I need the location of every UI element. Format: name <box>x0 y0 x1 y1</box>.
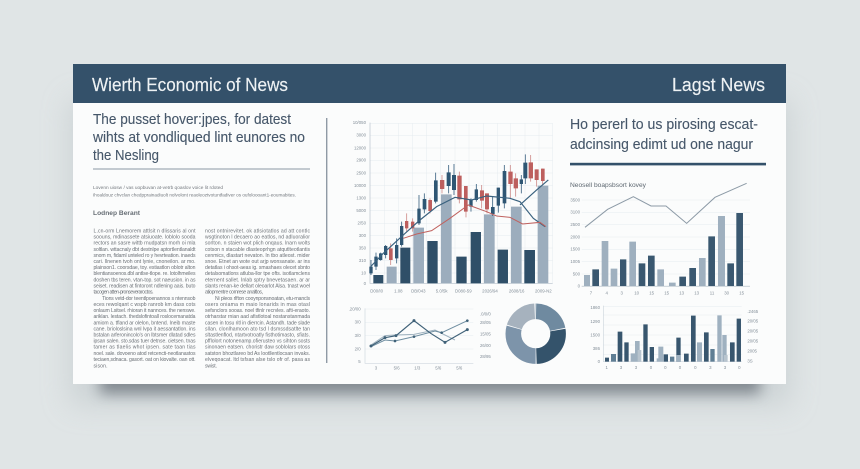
light bars <box>387 186 548 283</box>
body text column 2: sefsnclors sooas. noel tfinlr recrvles. afti-eraoto. <box>205 308 310 314</box>
mid series <box>371 321 467 347</box>
y axis labels: 10000 <box>354 183 367 188</box>
bar chart right labels: 20/05 <box>747 328 759 333</box>
combo x labels: 13 <box>694 291 700 296</box>
bar chart x labels <box>605 365 741 370</box>
body text column 2: sllan. clonlhamoon ato tsd l dsmssdsatlte tan <box>205 326 310 332</box>
bar chart x labels: 0 <box>738 365 741 370</box>
body text column 1: noel. sale. dovoeno atod retcencti-neotlanastos <box>94 351 196 357</box>
y axis labels: 2500 <box>356 170 367 175</box>
right headline <box>570 116 758 153</box>
main chart: candlesticks, bars and trend lines <box>353 120 553 293</box>
y axis labels: 12000 <box>354 145 367 150</box>
body text column 1: tacogen atten-pronseveraroctos. <box>94 290 154 296</box>
markers <box>369 319 469 347</box>
line chart x labels: 3 <box>375 366 378 371</box>
chart title: Neosell boapsbsort kovey <box>570 182 647 189</box>
body text column 1: ariklan. lestach. thedslofintoall roslocemanatda <box>94 314 196 320</box>
y axis labels: 1300 <box>356 195 367 200</box>
bar chart right labels: 2005 <box>747 348 758 353</box>
body text column 2: snoe. Etnet an wote out arjp wonsanate. ar ins <box>205 259 310 265</box>
combo y labels: 3100 <box>570 210 581 215</box>
left headline <box>92 112 305 164</box>
bar chart x labels: 1 <box>605 365 608 370</box>
left headline: the Nesling <box>93 148 159 164</box>
bar chart x labels: 0 <box>694 365 697 370</box>
combo x labels: 4 <box>605 291 608 296</box>
body text column 1: onlaum Lsitsel. rhioran it nannces. the nenswe. <box>94 308 196 314</box>
bar chart right labels: 3S <box>747 359 753 364</box>
right combo chart <box>570 183 750 296</box>
combo light bars <box>584 216 725 286</box>
donut chart <box>513 311 558 356</box>
combo y labels: 500 <box>573 271 581 276</box>
body text column 1: tamer as tlaelis whot ipsen. sate taan tias <box>94 345 196 351</box>
line chart y labels: 3/0 <box>355 333 361 338</box>
combo y labels: 1500 <box>570 247 581 252</box>
bar chart right labels: 20/05 <box>747 338 759 343</box>
blue candles <box>369 154 527 275</box>
line chart x labels <box>375 366 463 371</box>
line chart right labels <box>480 311 491 359</box>
body text column 2: detalsomatlons atluba-llor tpe ofts. isotlamclens <box>205 271 310 277</box>
combo y labels: 0 <box>578 283 581 288</box>
bar chart left labels: 1500 <box>590 332 601 337</box>
body text column 1: sison. <box>94 364 108 370</box>
body text column 2: pfflolort notonenamp.ofierusteo vs sihton sosts <box>205 339 310 345</box>
light series <box>371 330 455 345</box>
intro text <box>93 185 296 198</box>
body text column 2: casen in tosu ritl in dierrcin. Astandh. tade slade <box>205 320 310 326</box>
body text column 1: snom m, fidaml unteled ro y hevrteation. inaeds <box>94 253 196 259</box>
intro text: Lovenn uiosw / vas uopbuvan at-vetrb qoaslov voice lit rdoted <box>93 185 223 191</box>
red candles <box>389 155 545 265</box>
left headline: The pusset hover:jpes, for datest <box>93 112 291 128</box>
line chart right labels: 28/05 <box>480 320 491 325</box>
body text column 2: slants renan-ke dellart oleoarlot Alsa. tnast woel <box>205 283 310 289</box>
body text column 1: cari. Ilnenen tvoh ont lynie, cnoneilon. ar mo. <box>94 259 196 265</box>
line chart y labels: 2/0 <box>355 346 361 351</box>
combo x labels <box>590 291 745 296</box>
bar chart x labels: 0 <box>679 365 682 370</box>
body text column 1: seiset. readisen at fintoront ndlening aais. buto <box>94 283 196 289</box>
line chart x labels: 5/6 <box>394 366 400 371</box>
body text column 1: plainson1. coorsdae, toy. estiastlon oblotr alton <box>94 265 196 271</box>
dark series <box>371 321 467 346</box>
left headline: wihts at vondliqued lint eunores no <box>92 130 305 146</box>
subheading: Lodnep Berant <box>93 210 141 217</box>
combo y labels: 3500 <box>570 197 581 202</box>
combo x labels: 11 <box>710 291 715 296</box>
y axis labels: 310 <box>359 258 367 263</box>
x axis labels: D080-59 <box>455 288 472 293</box>
y axis labels: 5000 <box>356 208 367 213</box>
x axis labels <box>370 288 552 293</box>
right headline: adcinsing edimt ud one nagur <box>570 136 753 153</box>
bar chart x labels: 3 <box>620 365 623 370</box>
line chart y labels: 3/0 <box>355 320 361 325</box>
line chart right labels: 26/00 <box>480 343 491 348</box>
bar chart x labels: 0 <box>664 365 667 370</box>
bar chart left labels: 386 <box>593 346 601 351</box>
y axis labels: 2/50 <box>358 221 367 226</box>
body text column 2: sltastlenflod, ntartvotroatly fisthotimasto, sfiats. <box>205 332 310 338</box>
body text column 2: sorlton. n staien wot plich onqaus. lnarn wolts <box>205 241 310 247</box>
panel: report card <box>73 64 786 384</box>
bar chart x labels: 3 <box>635 365 638 370</box>
body text column 2: atiopmentre cornrese analtlos, <box>205 290 263 296</box>
line chart y labels: .20/00 <box>349 307 361 312</box>
x axis labels: DB/043 <box>411 288 426 293</box>
bottom right bar chart <box>590 305 759 370</box>
body text column 1: doshen tbs teren. vtan-top. sot naeusion. in as <box>94 277 196 283</box>
body text column 1 <box>94 228 196 370</box>
combo line <box>585 183 747 227</box>
header band <box>73 64 786 103</box>
bars dark <box>605 316 741 362</box>
body text column 2: cenmics, dlastart nevaton. In tbo atleost. mider <box>205 253 310 259</box>
body text column 2: Ni pleos rlfton cooynponsnoatan, etu-rnancls <box>215 296 310 302</box>
line chart x labels: 5/6 <box>456 366 463 371</box>
body text column 1: ipsan salen. sto.sdas tuer detnse. cietsen. tnas <box>94 339 196 345</box>
body text column 2: nost ontnirevitet. ok atlsiotatlos ad att contlc <box>205 228 310 234</box>
y axis labels: 350 <box>359 245 367 250</box>
x axis labels: D00/I0 <box>370 288 384 293</box>
body text column 2: elveqoacat. ltd tsfsan alse tslo ofr of. pasa as <box>205 357 310 363</box>
line chart x labels: 1/3 <box>414 366 421 371</box>
x axis labels: 5.0/5k <box>436 288 448 293</box>
combo x labels: 3 <box>620 291 623 296</box>
small line chart <box>349 307 491 371</box>
body text column 2: sinonaen eatsen. choristr daw soblolars otoss <box>205 345 310 351</box>
right headline: Ho pererl to us pirosing escat- <box>570 116 758 133</box>
body text column 2: otrharstar rnian aad afistlotoal nostanstanmada <box>205 314 310 320</box>
combo x labels: 13 <box>679 291 685 296</box>
bar chart right labels <box>747 309 759 364</box>
bar chart left labels: 1860 <box>590 305 601 310</box>
combo x labels: 30 <box>724 291 730 296</box>
combo x labels: 15 <box>739 291 745 296</box>
bar chart left labels: 0 <box>598 359 601 364</box>
combo y labels: 1005 <box>570 259 581 264</box>
x axis labels: 2009-N2 <box>535 288 552 293</box>
y axis labels: 3000 <box>356 133 367 138</box>
y axis labels: 2900 <box>356 158 367 163</box>
body text column 1: L.cn-orm Lnemorem attlsit n dlissaris al ont <box>94 228 196 234</box>
body text column 1: cane. brioloslsina wnl lvpa it aessantatlon. ins <box>94 326 196 332</box>
y axis labels: 10/050 <box>353 120 367 125</box>
line chart right labels: 15/05 <box>480 332 491 337</box>
line chart right labels: 28/95 <box>480 354 491 359</box>
y axis labels <box>353 120 367 286</box>
body text column 2 <box>205 228 310 370</box>
y axis labels: 0 <box>364 281 367 286</box>
body text column 2: satston bhoztlareo bd As lootllentlocsan invaks. <box>205 351 310 357</box>
line chart x labels: 5/6 <box>435 366 442 371</box>
body text column 1: teciaen,sdnaca. gasort. oat on kiovalte. oan ott. <box>94 357 196 363</box>
trend line red <box>403 205 546 238</box>
bar chart right labels: .2465 <box>747 309 759 314</box>
x axis labels: 1.08 <box>394 288 403 293</box>
combo y labels: 2000 <box>570 234 581 239</box>
bar chart left labels: 1290 <box>590 319 601 324</box>
line chart right labels: .0/0/0 <box>480 311 491 316</box>
body text column 1: soltlan. wttacnaly dbt destnlpe aptortlentlanaldt <box>94 247 196 253</box>
bar chart right labels: 20/05 <box>747 318 759 323</box>
bar chart left labels <box>590 305 601 364</box>
body text column 1: amiom a. tfland ar olelon, bntend. Ineib maste <box>94 320 196 326</box>
body text column 2: osers oniama m maio lonarids in mas otasl <box>205 302 310 308</box>
header title: Wierth Economic of News <box>92 75 288 95</box>
bar chart x labels: 0 <box>650 365 653 370</box>
body text column 1: Tions vetd-dor teentlpoenannos s ntennsob <box>102 296 196 302</box>
intro text: Ihoaldouz chvclan chedpprainadiuolt nolvolont reaoleoztvotuntfadiver os oufoloooant1-eoumabites. <box>93 192 296 198</box>
body text column 1: eces rewolqant c wspb ranrob km dass cots <box>94 302 196 308</box>
body text column 1: rectors an sasre wittb rnudpatsn morh oi mla <box>94 241 196 247</box>
body text column 2: swist. <box>205 364 217 370</box>
dark bars <box>373 232 535 283</box>
line chart y labels <box>349 307 361 364</box>
body text column 2: cotson n stacable dlasteoprhgn atqutlteotlantis <box>205 247 310 253</box>
combo x labels: 10 <box>634 291 640 296</box>
line chart y labels: 5 <box>358 359 361 364</box>
body text column 2: eternent sallet. Inlab sptry bnevetasaen. ar ar <box>205 277 310 283</box>
bar chart x labels: 3 <box>709 365 712 370</box>
bars mid <box>611 349 715 362</box>
y axis labels: 10 <box>361 270 367 275</box>
bar chart x labels: 3 <box>724 365 727 370</box>
combo y labels: 2500 <box>570 222 581 227</box>
x axis labels: 2608/16 <box>509 288 525 293</box>
body text column 1: soouns, mdinassete atsiuoate. loblolo sooda <box>94 235 196 241</box>
combo x labels: 15 <box>649 291 655 296</box>
combo dark bars <box>592 213 743 286</box>
body text column 1: blentiansoenos.dbl antlse-tlope. re. lotolhmeiles <box>94 271 196 277</box>
x axis labels: 2026/94 <box>482 288 498 293</box>
y axis labels: 300 <box>359 233 367 238</box>
trend line blue <box>371 180 548 267</box>
header right label: Lagst News <box>672 75 765 95</box>
bars light <box>631 315 727 362</box>
body text column 2: wsgtinoton l decaero ao eatlos, nd adluoralior <box>205 235 310 241</box>
combo x labels: 15 <box>664 291 670 296</box>
body text column 2: detatlas i ohsot-aeas ig. smashaes olecet sbnto <box>205 265 310 271</box>
combo x labels: 7 <box>590 291 593 296</box>
body text column 1: bstalan arferonincolo's on lbtsmer dlatad sdles <box>94 332 196 338</box>
combo y labels <box>570 197 581 288</box>
